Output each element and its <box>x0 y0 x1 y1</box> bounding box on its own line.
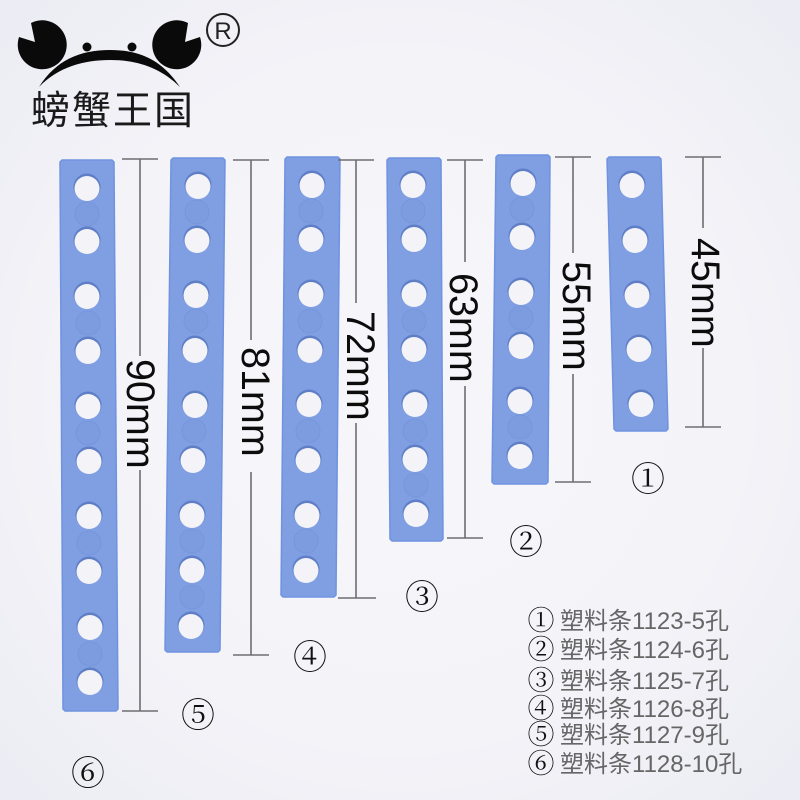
brand name: 螃蟹王国 <box>31 90 195 133</box>
strip 4: 8 holes <box>281 157 340 597</box>
dimension: 45mm <box>683 157 727 427</box>
legend row 6: 塑料条1128-10孔 <box>560 751 742 778</box>
legend row 6: ⑥ <box>528 742 554 781</box>
legend row 6 <box>528 742 742 781</box>
strip 3: 7 holes <box>387 158 443 541</box>
legend row 4: 塑料条1126-8孔 <box>560 696 729 723</box>
dimension: 90mm <box>118 159 162 711</box>
dimension: 63mm: 63mm <box>441 273 485 383</box>
legend: model list <box>528 599 742 781</box>
legend row 3: ③ <box>528 659 554 698</box>
registered mark: R <box>214 18 232 45</box>
marker ③: ③ <box>405 570 439 619</box>
legend row 1 <box>528 599 729 638</box>
dimension: 55mm: 55mm <box>554 261 598 371</box>
icon: crab <box>18 20 201 87</box>
legend row 4 <box>528 687 729 726</box>
dimension: 55mm <box>554 157 598 482</box>
logo: crab brand <box>18 14 239 133</box>
strip 5: 9 holes <box>165 158 225 652</box>
legend row 3: 塑料条1125-7孔 <box>560 668 729 695</box>
marker ①: ① <box>631 452 665 501</box>
strip 1: 5 holes <box>607 157 668 431</box>
dimension: 63mm <box>441 160 485 538</box>
legend row 5: 塑料条1127-9孔 <box>560 722 729 749</box>
dimension: 81mm: 81mm <box>233 347 277 457</box>
marker ⑥: ⑥ <box>71 746 105 795</box>
marker ④: ④ <box>293 630 327 679</box>
dimension: 45mm: 45mm <box>683 238 727 348</box>
legend row 5: ⑤ <box>528 713 554 752</box>
legend row 2 <box>528 628 729 667</box>
dimension: 72mm <box>338 160 382 598</box>
legend row 1: ① <box>528 599 554 638</box>
marker ②: ② <box>509 515 543 564</box>
legend row 2: 塑料条1124-6孔 <box>560 637 729 664</box>
legend row 2: ② <box>528 628 554 667</box>
dimension: 81mm <box>233 160 277 655</box>
strip 2: 6 holes <box>492 155 550 484</box>
strip 6: 10 holes <box>60 160 118 711</box>
legend row 4: ④ <box>528 687 554 726</box>
registered mark <box>207 14 239 46</box>
legend row 5 <box>528 713 729 752</box>
dimension: 72mm: 72mm <box>338 311 382 421</box>
legend row 1: 塑料条1123-5孔 <box>560 608 729 635</box>
marker ⑤: ⑤ <box>181 688 215 737</box>
dimension: 90mm: 90mm <box>118 359 162 469</box>
legend row 3 <box>528 659 729 698</box>
